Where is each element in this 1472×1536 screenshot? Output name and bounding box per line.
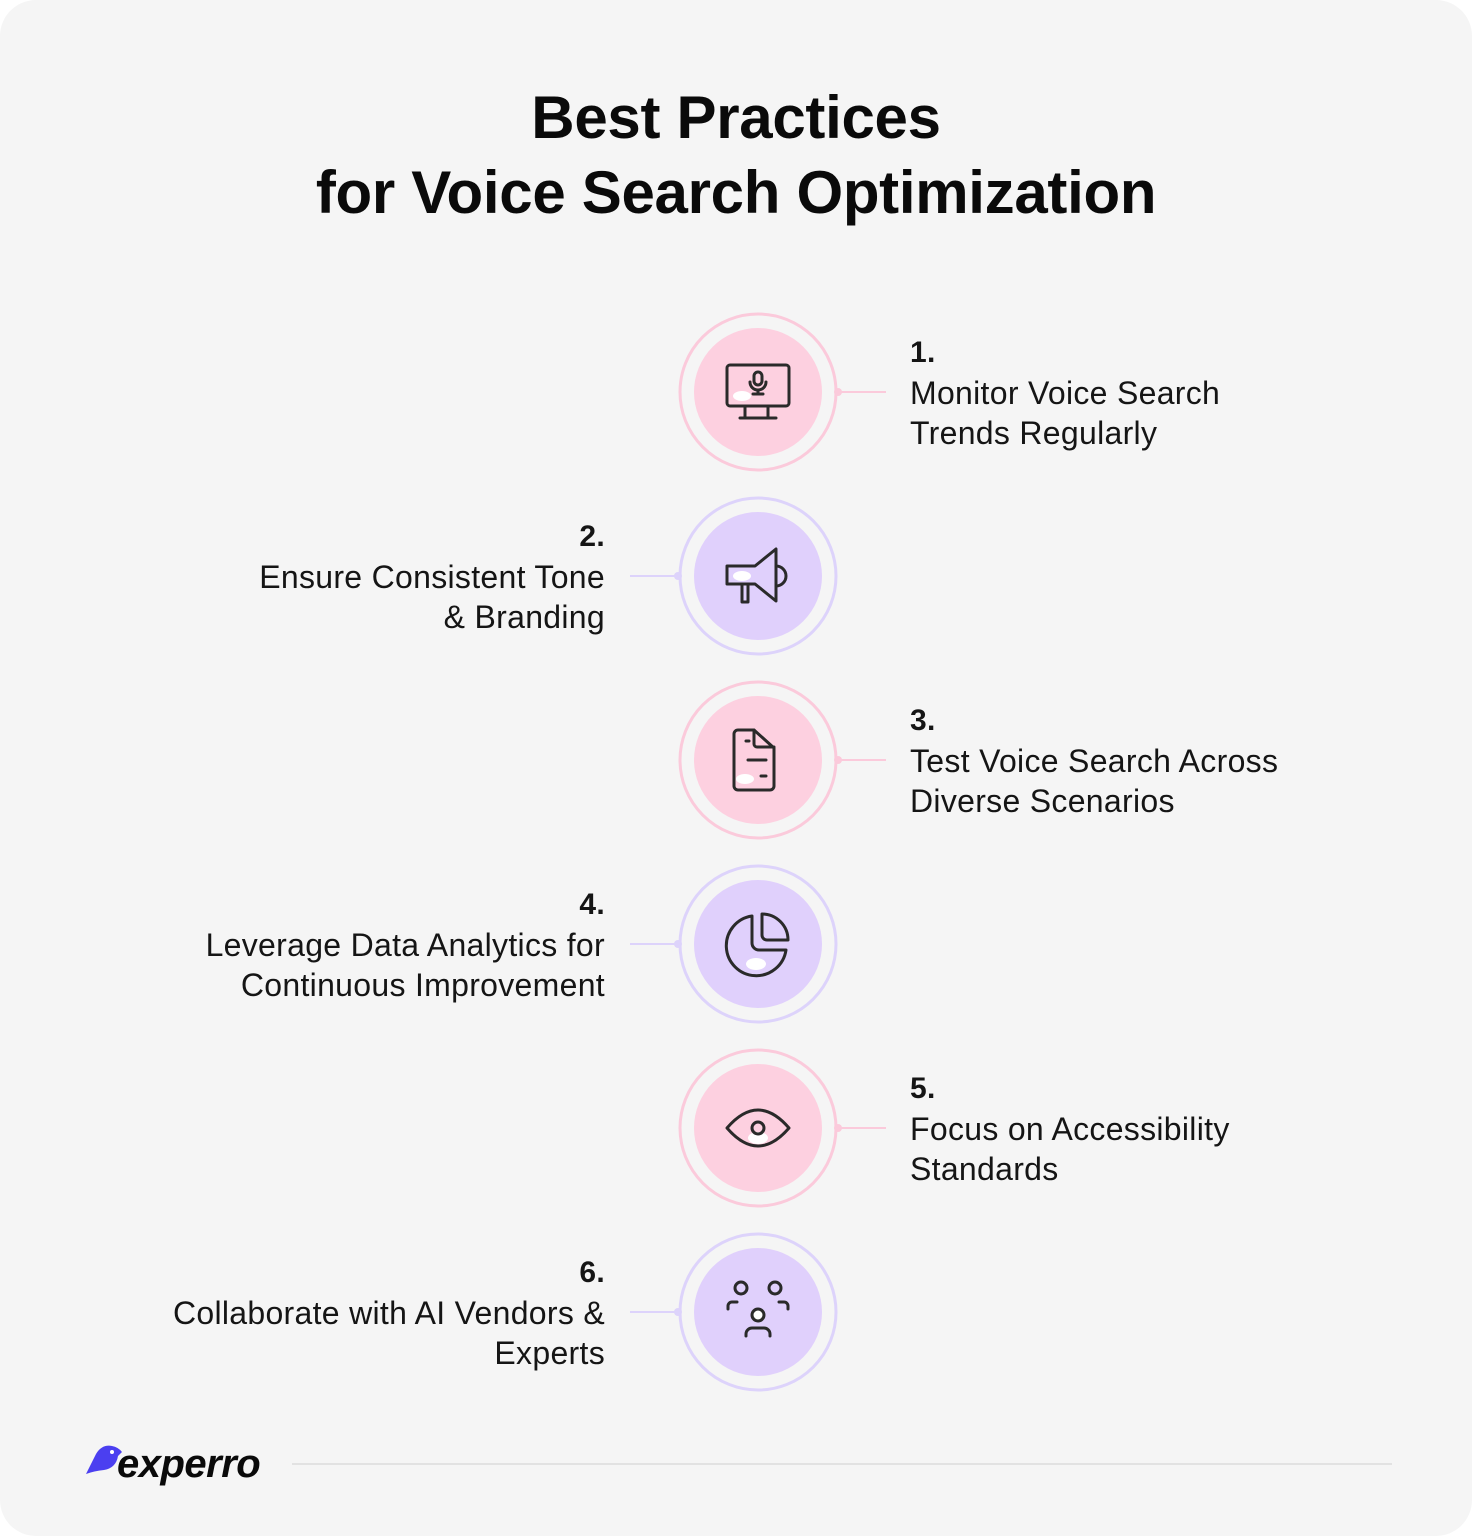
step 4 text: Continuous Improvement: [241, 967, 605, 1003]
step 6 text: Experts: [494, 1335, 605, 1371]
logo wordmark: experro: [117, 1442, 260, 1486]
step 4 text: Leverage Data Analytics for: [206, 927, 605, 963]
step 4 circle: pie chart: [630, 866, 836, 1022]
step 5 text: Focus on Accessibility: [910, 1111, 1230, 1147]
footer divider: [292, 1463, 1392, 1465]
step 3 text: Diverse Scenarios: [910, 783, 1175, 819]
title: [316, 84, 1156, 226]
title: Best Practices: [531, 84, 941, 151]
step 1 text: Monitor Voice Search: [910, 375, 1220, 411]
title: for Voice Search Optimization: [316, 159, 1156, 226]
step 5 circle: eye: [680, 1050, 886, 1206]
step 6 circle: people: [630, 1234, 836, 1390]
step 1 text: Trends Regularly: [910, 415, 1157, 451]
step 5 text: 5.: [910, 1072, 936, 1105]
step 6 text: Collaborate with AI Vendors &: [173, 1295, 605, 1331]
step 3 text: Test Voice Search Across: [910, 743, 1278, 779]
step 2 text: [259, 520, 605, 635]
step 2 text: 2.: [579, 520, 605, 553]
step 3 circle: document: [680, 682, 886, 838]
logo bird icon: [86, 1446, 122, 1474]
step 4 text: 4.: [579, 888, 605, 921]
step 3 text: 3.: [910, 704, 936, 737]
step 1 text: 1.: [910, 336, 936, 369]
step 6 text: [173, 1256, 605, 1371]
step 5 text: [910, 1072, 1230, 1187]
step 2 text: Ensure Consistent Tone: [259, 559, 605, 595]
step 2 circle: megaphone: [630, 498, 836, 654]
step 1 text: [910, 336, 1220, 451]
step 5 text: Standards: [910, 1151, 1059, 1187]
step 6 text: 6.: [579, 1256, 605, 1289]
step 2 text: & Branding: [444, 599, 605, 635]
step 3 text: [910, 704, 1278, 819]
step 1 circle: monitor: [680, 314, 886, 470]
step 4 text: [206, 888, 605, 1003]
